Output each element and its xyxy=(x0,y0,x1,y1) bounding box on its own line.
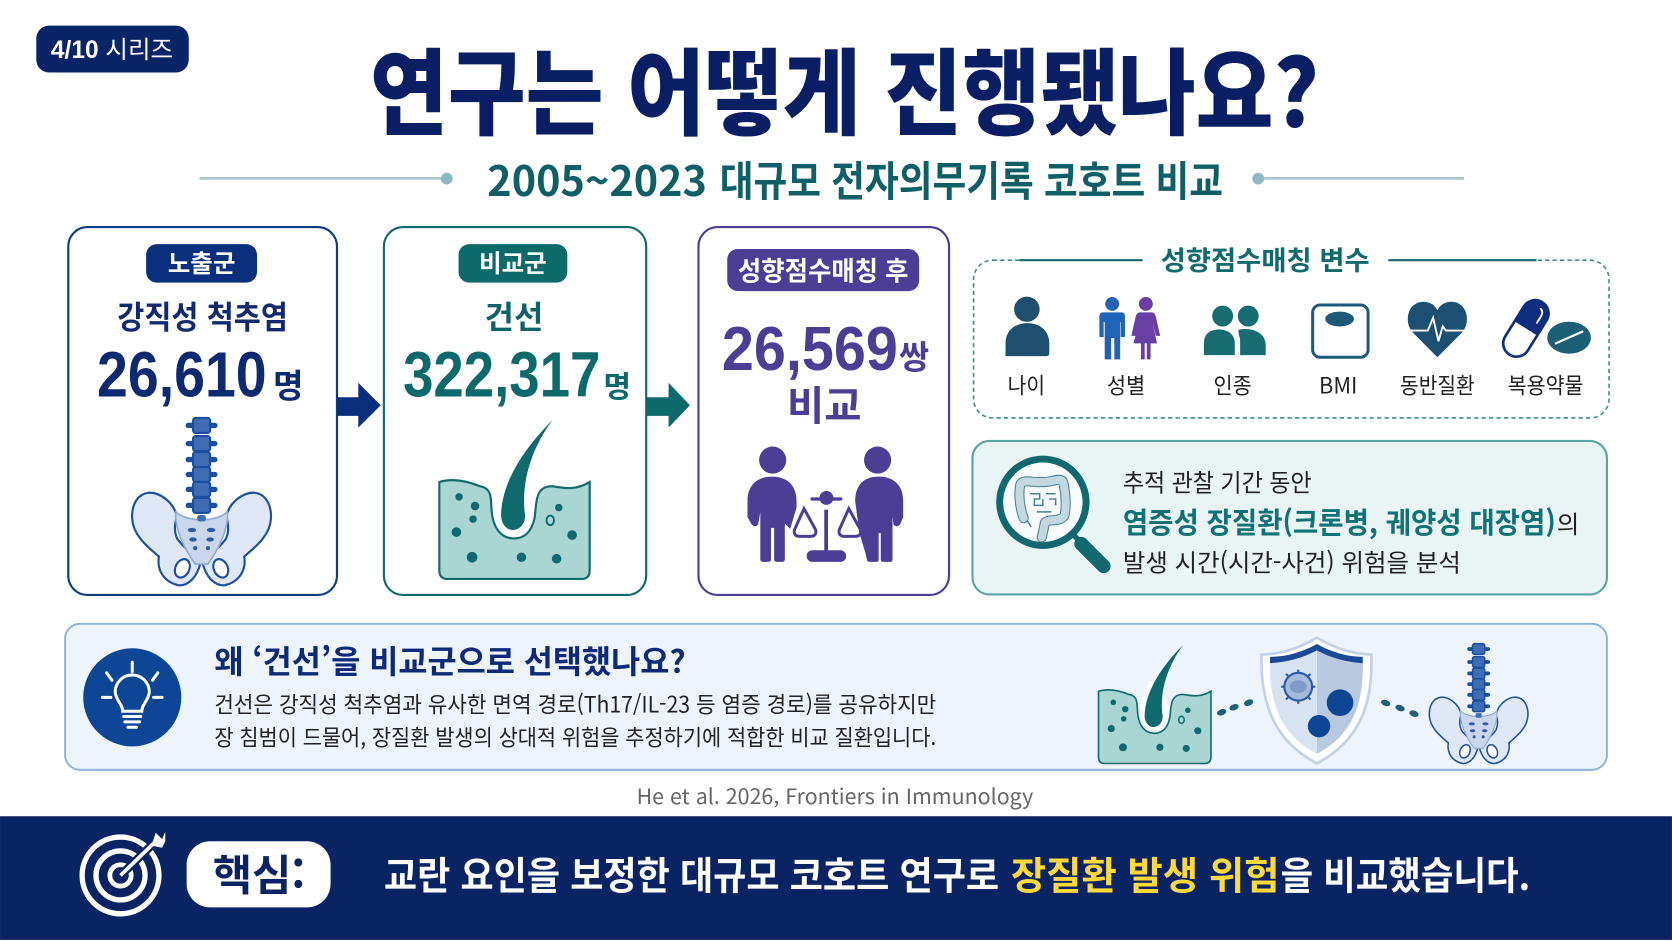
patient count: 명 xyxy=(273,360,303,408)
icon: target with arrow xyxy=(82,832,165,914)
variable: age: 나이 xyxy=(1008,368,1045,400)
explanation text: 건선은 강직성 척추염과 유사한 면역 경로(Th17/IL-23 등 염증 경로)를 공유하지만 xyxy=(214,687,936,719)
condition name: 건선 xyxy=(485,292,543,338)
badge: comparison group: 비교군 xyxy=(479,245,547,280)
matched pair count: 26,569 xyxy=(722,315,898,384)
icon: magnifier over intestine xyxy=(1000,459,1104,566)
subtitle with rules xyxy=(199,148,1464,208)
subtitle with rules: 2005~2023 xyxy=(487,148,707,208)
patient count: 26,610 xyxy=(97,339,267,411)
key message: 교란 요인을 보정한 대규모 코호트 연구로 xyxy=(384,845,999,901)
badge: comparison group xyxy=(459,244,567,283)
icon: skin xyxy=(1098,645,1211,764)
variable: race: 인종 xyxy=(1213,368,1252,400)
arrow: skin to shield xyxy=(1216,698,1254,717)
analysis text: 추적 관찰 기간 동안 xyxy=(1123,465,1312,500)
variable: BMI: BMI xyxy=(1319,368,1357,400)
variable: sex: 성별 xyxy=(1107,368,1145,400)
variable: medication: 복용약물 xyxy=(1508,368,1583,400)
key message xyxy=(384,845,1530,901)
analysis text: 의 xyxy=(1557,506,1579,541)
panel: why psoriasis xyxy=(65,624,1607,770)
patient count: 명 xyxy=(604,363,631,407)
key message: 을 비교했습니다. xyxy=(1281,845,1530,901)
analysis text: 발생 시간(시간-사건) 위험을 분석 xyxy=(1123,545,1461,580)
panel: comparison group xyxy=(384,227,646,595)
icon: spine and pelvis xyxy=(132,418,271,585)
panel: analysis outcome xyxy=(972,441,1607,594)
series badge: 4/10 시리즈 xyxy=(51,36,173,64)
title: 연구는 어떻게 진행됐나요? xyxy=(370,19,1319,155)
icon: spine and pelvis small xyxy=(1429,644,1528,764)
variable: race xyxy=(1204,306,1266,400)
analysis text: 염증성 장질환(크론병, 궤양성 대장염) xyxy=(1123,501,1556,542)
key label: 핵심: xyxy=(213,842,305,903)
icon: psoriasis skin xyxy=(439,420,590,579)
footer band xyxy=(0,816,1672,940)
panel: exposed group xyxy=(68,227,337,595)
explanation text: 장 침범이 드물어, 장질환 발생의 상대적 위험을 추정하기에 적합한 비교 질환입니다. xyxy=(214,720,936,752)
key message: 장질환 발생 위험 xyxy=(1011,845,1280,901)
condition name: 강직성 척추염 xyxy=(117,292,288,338)
matched pair count: 쌍 xyxy=(899,331,929,379)
key label xyxy=(187,841,331,907)
icon: two people with scale xyxy=(747,447,903,562)
badge: exposed group: 노출군 xyxy=(168,245,235,280)
badge: exposed group xyxy=(146,244,257,283)
arrow: shield to spine xyxy=(1380,699,1419,718)
variable: comorbidity xyxy=(1400,302,1475,400)
arrow: exposed to comparison xyxy=(337,383,381,428)
panel: matching variables xyxy=(974,239,1609,418)
variable: sex xyxy=(1099,297,1160,400)
panel: after matching xyxy=(698,227,949,595)
heading: matching variables: 성향점수매칭 변수 xyxy=(1161,239,1370,278)
variable: age xyxy=(1006,297,1049,400)
compare label: 비교 xyxy=(787,373,862,432)
series badge xyxy=(36,26,189,73)
variable: medication xyxy=(1498,295,1591,400)
analysis text xyxy=(1123,465,1579,580)
arrow: comparison to matched xyxy=(646,383,690,428)
icon: light bulb xyxy=(83,648,181,746)
subtitle with rules: 대규모 전자의무기록 코호트 비교 xyxy=(720,148,1223,208)
badge: after matching: 성향점수매칭 후 xyxy=(738,249,909,288)
citation: He et al. 2026, Frontiers in Immunology xyxy=(637,780,1033,811)
variable: BMI xyxy=(1313,305,1368,400)
explanation text xyxy=(214,687,936,752)
heading: why psoriasis: 왜 ‘건선’을 비교군으로 선택했나요? xyxy=(214,637,686,683)
variable: comorbidity: 동반질환 xyxy=(1400,368,1475,400)
patient count: 322,317 xyxy=(403,339,600,411)
icon: immune shield xyxy=(1261,638,1371,763)
